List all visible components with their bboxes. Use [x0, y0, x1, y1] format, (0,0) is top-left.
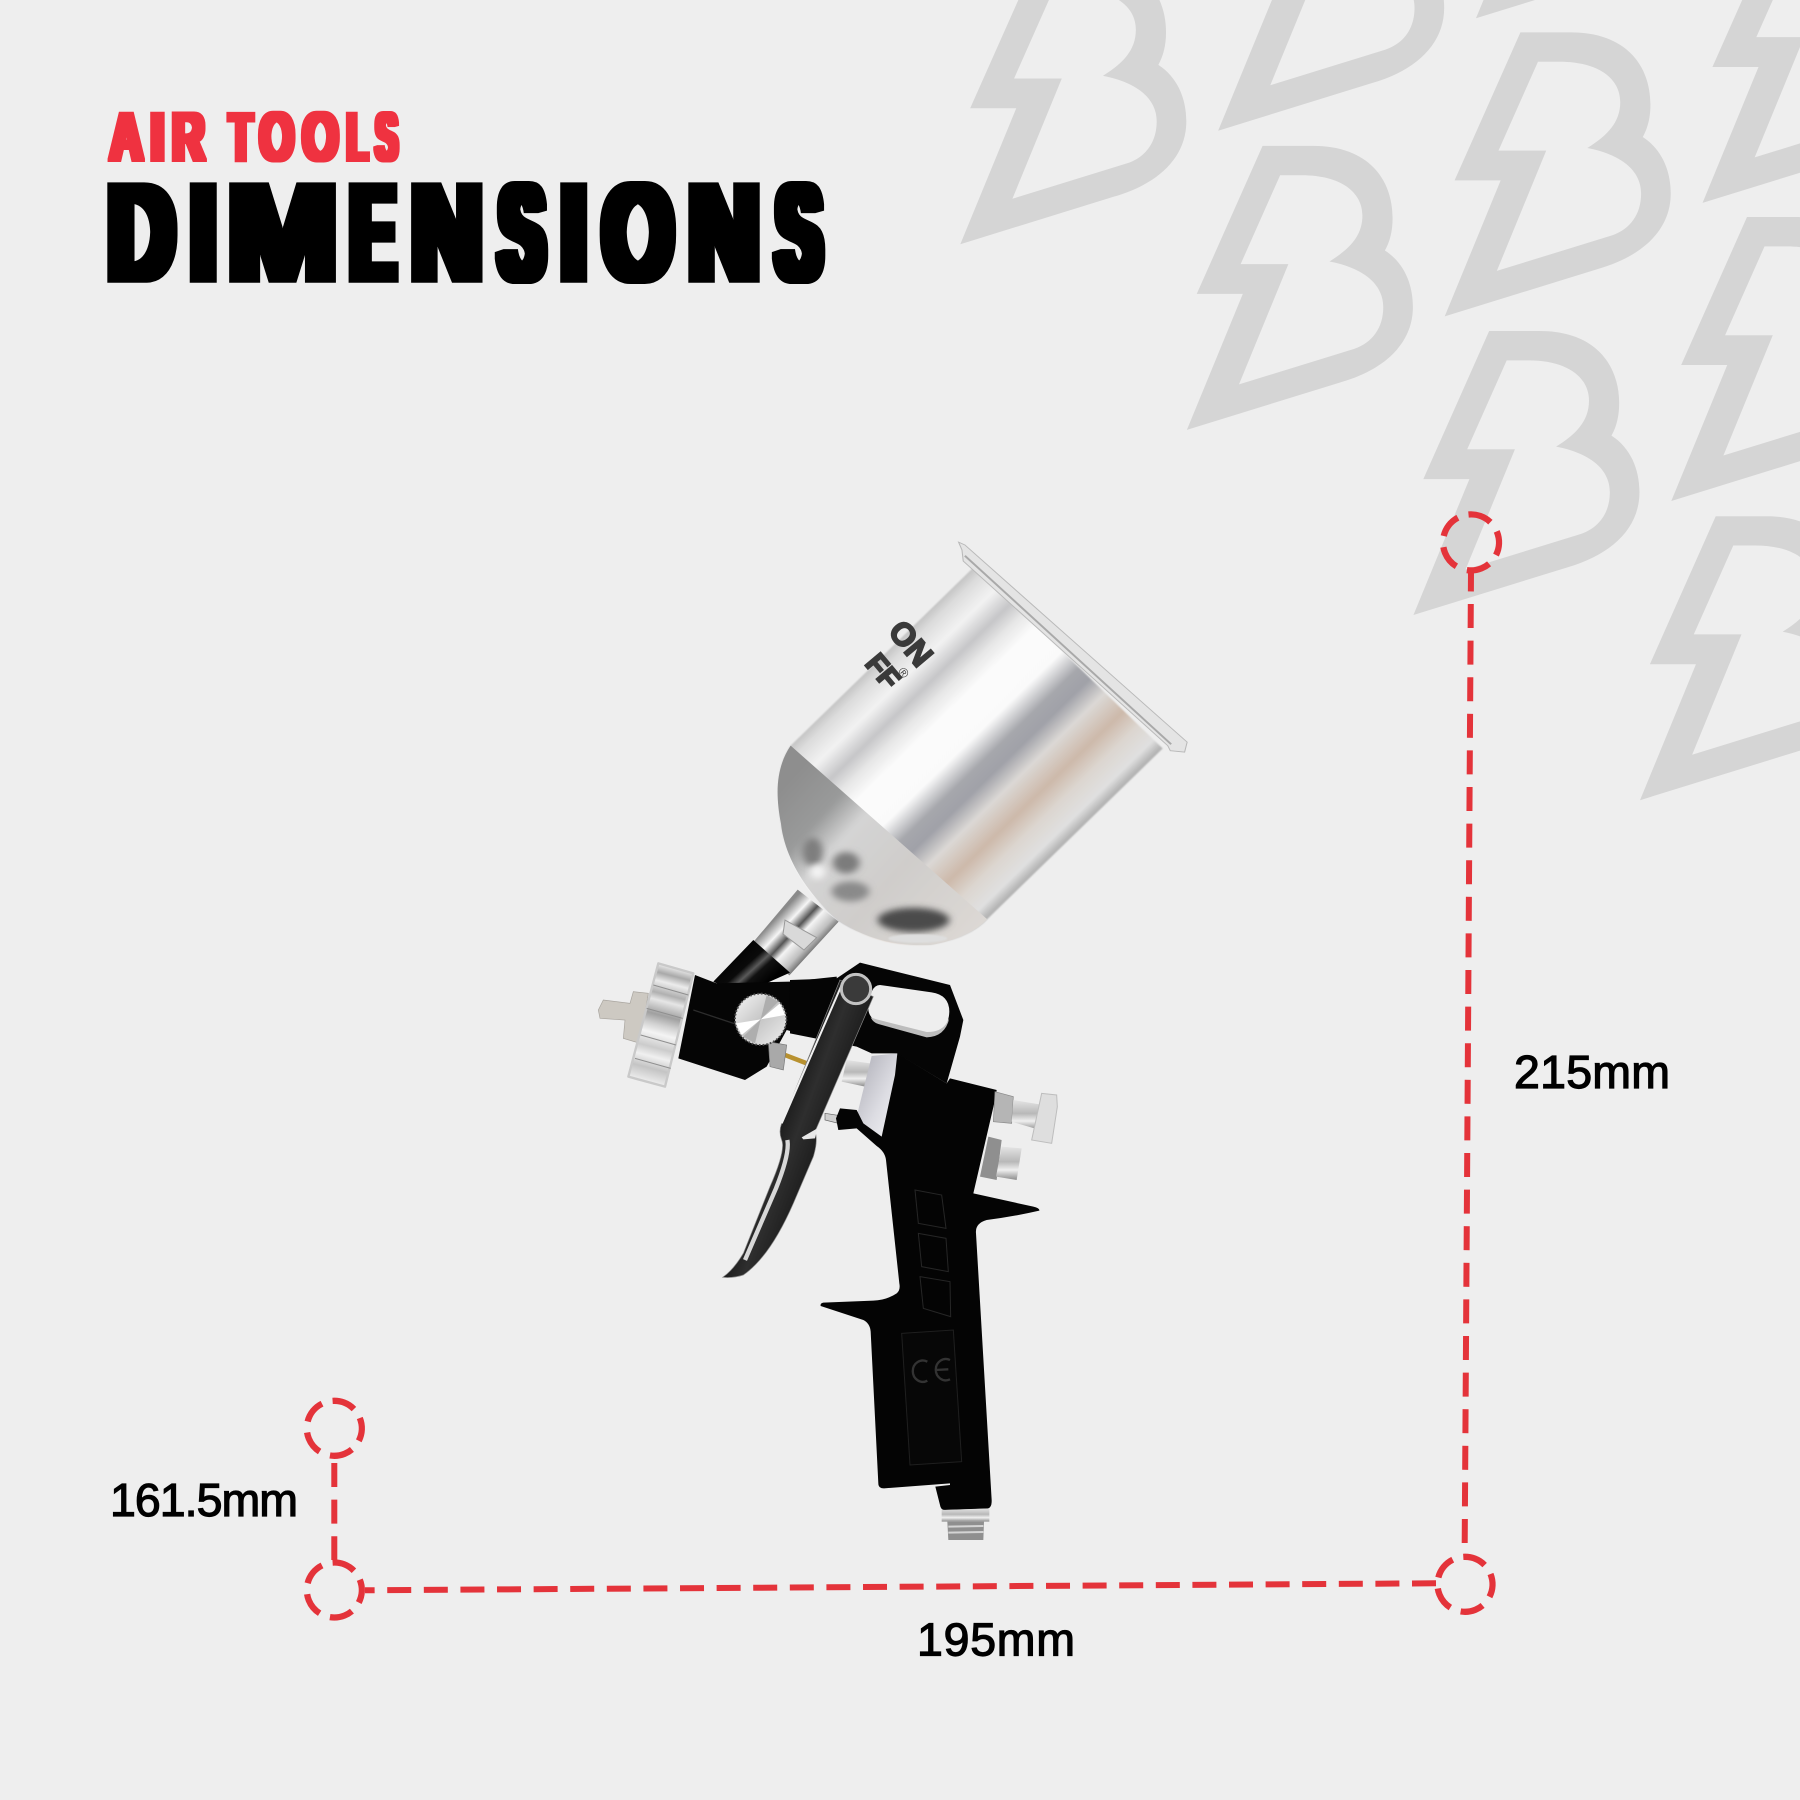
piston: [842, 1060, 870, 1087]
gun frame with loop: [790, 963, 963, 1083]
heading: DIMENSIONS: I: [191, 157, 216, 310]
dashed line: [1465, 572, 1471, 1543]
paint cup: [762, 542, 1187, 956]
neck nut: [783, 920, 817, 950]
cup body: [778, 566, 1163, 945]
heading: DIMENSIONS: I: [561, 157, 586, 310]
cup logo text: ®: [895, 664, 913, 682]
subtitle: AIR TOOLS: O: [260, 100, 294, 176]
text: S: [777, 157, 821, 310]
measure: width 195mm (bottom): [365, 1583, 1436, 1666]
heading: DIMENSIONS: E: [351, 157, 394, 310]
cup rim: [959, 542, 1187, 752]
silver air cap ring: [628, 963, 693, 1087]
rear fluid knob: [993, 1092, 1057, 1143]
hex nut: [768, 1042, 787, 1070]
heading: DIMENSIONS: N: [412, 157, 482, 310]
heading: DIMENSIONS: O: [603, 157, 673, 310]
rear hex cap: [980, 1137, 1022, 1180]
chrome neck: [754, 890, 839, 975]
bottom marker circle: [1429, 1549, 1501, 1620]
background pattern: repeated B logos: [960, 0, 1800, 800]
handle grip windows: [915, 1190, 951, 1317]
black head body: [678, 975, 840, 1080]
cup logo text: FF: [859, 648, 906, 696]
dashed line: [365, 1583, 1436, 1590]
subtitle: AIR TOOLS: O: [302, 100, 338, 176]
heading: DIMENSIONS: S: [500, 157, 544, 310]
measure: height 161.5mm (left): [110, 1393, 370, 1626]
measure: height 215mm (right): [1429, 506, 1670, 1620]
dashed line: [331, 1463, 337, 1560]
label: 161.5mm: [110, 1474, 298, 1526]
cup logo text: [859, 613, 940, 696]
gun body and handle: [821, 1053, 1039, 1510]
cup bowl shading: [778, 746, 987, 945]
handle label plate: [902, 1330, 962, 1465]
top marker circle: [1435, 506, 1507, 579]
title block: [108, 100, 821, 310]
subtitle: AIR TOOLS: I: [150, 100, 165, 176]
air inlet fitting: [942, 1508, 989, 1540]
CE mark: [913, 1359, 950, 1382]
bottom marker circle: [299, 1554, 370, 1626]
subtitle: AIR TOOLS: R: [172, 100, 204, 176]
black tube: [713, 940, 790, 995]
heading: DIMENSIONS: N: [689, 157, 759, 310]
subtitle: AIR TOOLS: T: [230, 100, 252, 176]
title block: S: [376, 100, 397, 176]
cup logo text: ON: [882, 613, 940, 673]
heading: DIMENSIONS: M: [227, 157, 338, 310]
heading: DIMENSIONS: D: [108, 157, 174, 310]
gun assembly: [598, 890, 1057, 1540]
label: 215mm: [1514, 1046, 1670, 1098]
bright side panel: [855, 1053, 897, 1137]
nozzle tip: [598, 992, 648, 1043]
brass pin: [785, 1055, 807, 1063]
trigger pin: [825, 1113, 840, 1123]
subtitle: AIR TOOLS: L: [347, 100, 368, 176]
label: 195mm: [917, 1614, 1075, 1666]
top marker circle: [299, 1393, 370, 1464]
spray gun product illustration: [598, 542, 1187, 1540]
trigger pivot screw: [841, 974, 871, 1004]
loop inner edge: [871, 1017, 949, 1037]
round adjuster knob: [735, 994, 786, 1045]
trigger lever: [723, 974, 873, 1278]
subtitle: AIR TOOLS: A: [110, 100, 143, 176]
